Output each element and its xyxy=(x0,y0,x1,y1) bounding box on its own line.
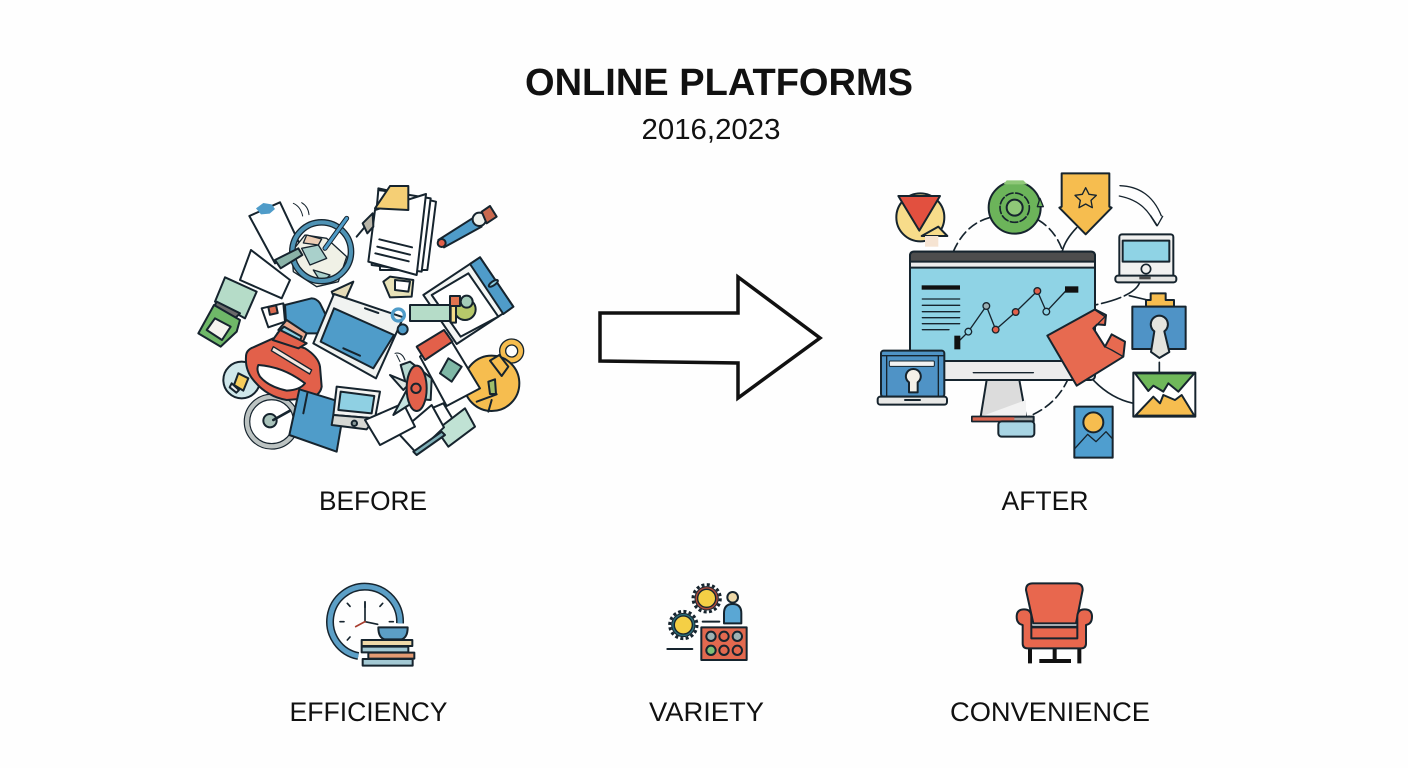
megaphone xyxy=(390,353,432,415)
illustration: after, organised dashboard xyxy=(878,173,1195,458)
dashed connectors xyxy=(952,218,1159,417)
blue padlock panel xyxy=(1132,293,1186,358)
illustration: before, cluttered pile xyxy=(198,186,521,455)
label: efficiency: EFFICIENCY xyxy=(290,697,448,727)
orange clip ball xyxy=(464,342,521,412)
icon: gears, person and colour palette xyxy=(667,585,747,660)
label: after: AFTER xyxy=(1002,486,1088,516)
blue shield and small note xyxy=(262,298,328,348)
globe ring with crumpled papers xyxy=(275,218,353,303)
arrow: before to after xyxy=(600,277,820,398)
badge: yellow star shield xyxy=(1059,173,1112,234)
red folded puzzle sheet xyxy=(1047,309,1125,386)
paintbrush xyxy=(438,206,497,247)
envelope xyxy=(1133,373,1195,417)
line chart on screen xyxy=(922,285,1078,349)
credit card box, green xyxy=(198,277,257,347)
blue box xyxy=(289,389,345,452)
small laptop xyxy=(332,387,380,429)
label: before: BEFORE xyxy=(319,486,427,516)
document stack with sticky note xyxy=(357,186,436,297)
badge: red triangle on yellow circle xyxy=(896,193,947,247)
tablet xyxy=(410,257,513,344)
laptop, upper right xyxy=(1115,234,1176,282)
label: convenience: CONVENIENCE xyxy=(950,697,1150,727)
curved arrow, top right xyxy=(1119,186,1163,226)
laptop, tilted xyxy=(313,294,408,378)
icon: armchair xyxy=(1017,583,1092,663)
title: ONLINE PLATFORMS xyxy=(525,62,913,104)
icon: clock and books xyxy=(330,587,414,666)
long paper with red bar and mint square xyxy=(417,330,480,406)
red printer xyxy=(246,330,322,400)
loose paper with blue blob xyxy=(249,202,309,263)
desktop monitor xyxy=(910,252,1095,437)
second loose paper xyxy=(240,250,290,298)
lightbulb disc xyxy=(223,362,260,398)
laptop with keyhole, left xyxy=(878,351,947,405)
scattered papers, bottom right xyxy=(365,403,475,455)
subtitle: years: 2016,2023 xyxy=(642,114,780,146)
photo card xyxy=(1074,407,1113,458)
label: variety: VARIETY xyxy=(649,697,764,727)
wheel xyxy=(247,397,296,446)
badge: green gear circle xyxy=(989,180,1043,234)
